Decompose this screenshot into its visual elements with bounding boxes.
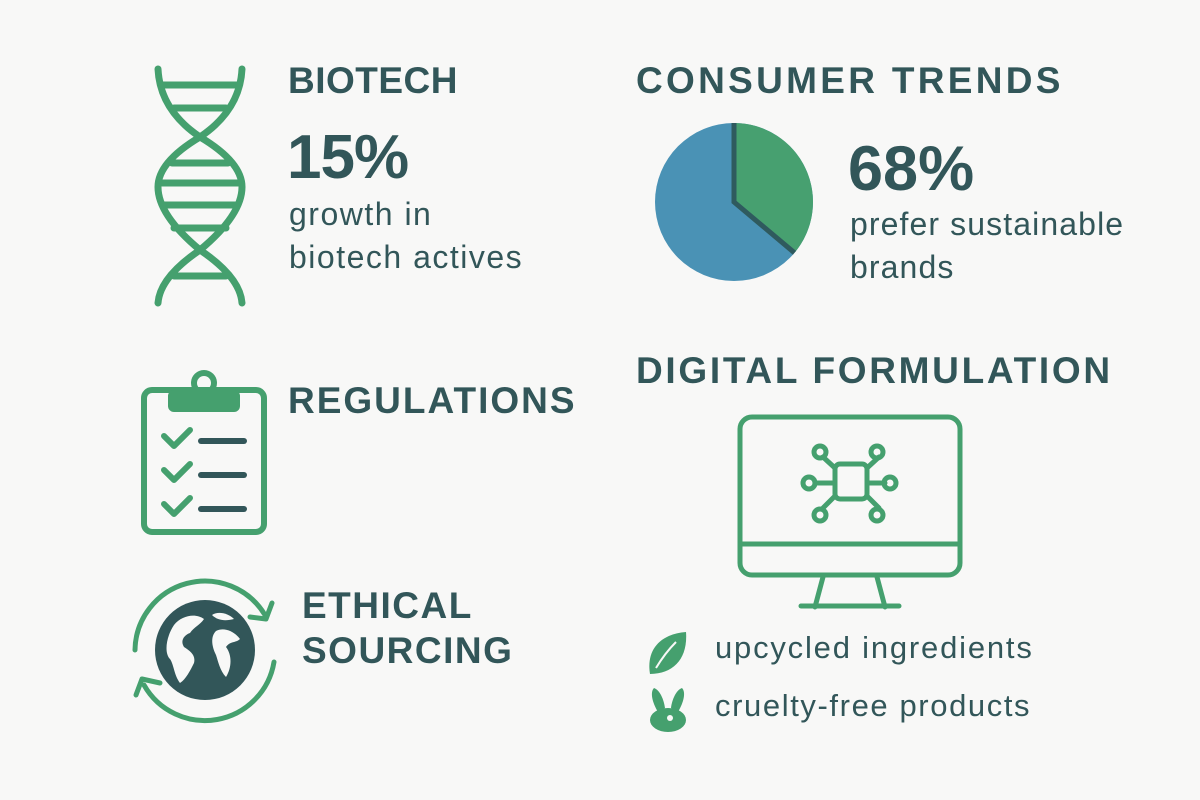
stat: 15%: 15%: [287, 123, 408, 192]
icon: monitor with molecule: [738, 414, 962, 610]
text: upcycled ingredients: upcycled ingredients: [715, 630, 1034, 665]
heading: consumer trends: CONSUMER TRENDS: [636, 60, 1064, 101]
text: prefer sustainable brands: [850, 206, 1124, 285]
text: growth in biotech actives: biotech actives: [289, 239, 523, 275]
icon: leaf: [649, 632, 686, 674]
text: prefer sustainable brands: brands: [850, 249, 954, 285]
heading: regulations: REGULATIONS: [288, 380, 577, 421]
icon: bunny: [650, 688, 686, 732]
text: cruelty-free products: cruelty-free products: [715, 688, 1031, 723]
icon: DNA helix: [154, 66, 246, 306]
heading: ethical sourcing: ETHICAL: [302, 585, 473, 626]
text: growth in biotech actives: [289, 196, 523, 275]
text: prefer sustainable brands: prefer sustainable: [850, 206, 1124, 242]
heading: ethical sourcing: [302, 585, 513, 671]
heading: biotech: BIOTECH: [288, 60, 458, 101]
icon: clipboard: [141, 370, 267, 535]
icon: globe with recycling arrows: [132, 578, 276, 724]
heading: digital formulation: DIGITAL FORMULATION: [636, 350, 1113, 391]
stat: 68%: 68%: [848, 134, 974, 204]
text: growth in biotech actives: growth in: [289, 196, 432, 232]
pie chart: [655, 123, 813, 281]
heading: ethical sourcing: SOURCING: [302, 630, 513, 671]
